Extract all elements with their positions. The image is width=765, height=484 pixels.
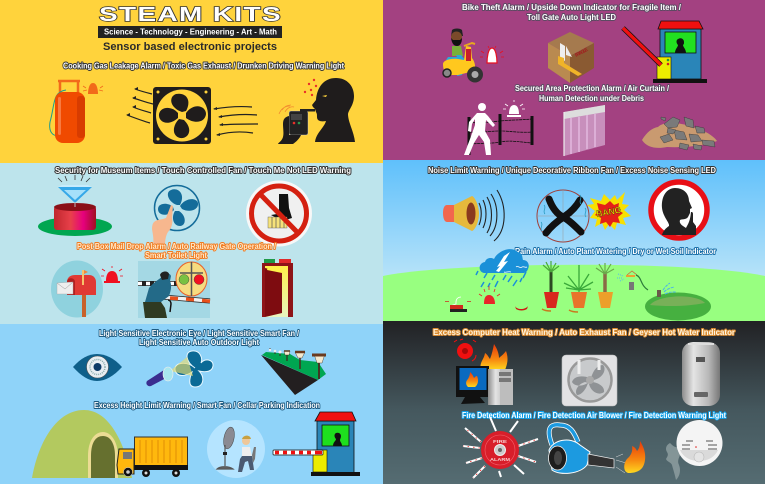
icon: fire alarm bell: ALARM [490,457,510,462]
section caption: Secured Area Protection Alarm / Air Curtain / [515,84,670,93]
section caption: Light Sensitive Electronic Eye / Light Sensitive Smart Fan / [99,329,300,338]
icon: fire alarm bell [463,417,538,478]
section caption: Noise Limit Warning / Unique Decorative Ribbon Fan / Excess Noise Sensing LED [428,166,716,175]
icon: overheating computer [454,339,513,405]
icon: open door with exit signs [262,259,293,317]
panel: theft, fragile and toll [383,0,765,160]
section caption: Bike Theft Alarm / Upside Down Indicator for Fragile Item / [462,3,682,12]
section caption: Fire Detection Alarm / Fire Detection Air Blower / Fire Detection Warning Light [462,411,726,420]
icon: air curtain [564,105,605,156]
icon: road with outdoor lamps [261,348,326,395]
icon: walker at fence with alarm [464,100,532,155]
icon: potted plants [542,261,614,312]
icon: electronic eye [73,354,122,381]
section caption [515,84,670,103]
section caption: Security for Museum Items / Touch Controlled Fan / Touch Me Not LED Warning [55,166,351,175]
icon: touch controlled fan [152,186,200,245]
section caption: Human Detection under Debris [539,94,645,103]
panel: noise and rain sensing [383,160,765,321]
panel: touch sensing [0,163,383,324]
subtitle bar: Science - Technology - Engineering - Art - Math [104,28,277,37]
section caption: Excess Computer Heat Warning / Auto Exhaust Fan / Geyser Hot Water Indicator [433,328,735,337]
icon: fragile box [548,32,594,83]
panel: heat and fire sensing [383,321,765,484]
icon: do not touch sign [246,180,312,246]
section caption [99,329,300,347]
icon: ribbon fan [537,190,589,242]
icon: gas cylinder with alarm [50,81,103,143]
section caption: Cooking Gas Leakage Alarm / Toxic Gas Exhaust / Drunken Driving Warning Light [63,62,344,70]
icon: person with smart fan [207,420,265,478]
icon: loudspeaker [443,190,504,241]
icon: rain cloud with lightning [476,249,529,287]
icon: diamond on pedestal [38,175,112,236]
section caption [77,242,277,260]
icon: breath analyser and head [278,78,355,144]
icon: toll booth with raised barrier [623,21,707,83]
icon: exhaust fan [562,355,617,406]
heading: sensor based projects: Sensor based electronic projects [103,41,277,53]
section caption: Post Box Mail Drop Alarm / Auto Railway Gate Operation / [77,242,277,251]
panel: gas and breath sensing [0,0,383,163]
section caption: Light Sensitive Auto Outdoor Light [139,338,259,347]
icon: water tap sprinkler [617,271,648,290]
icon: container truck [117,437,188,477]
icon: torch and smart fan [146,351,213,387]
icon: mailbox with alarm [51,260,123,318]
panel: light sensing and parking [0,324,383,484]
icon: toll booth with lowered barrier [273,412,360,476]
icon: exhaust fan with arrows [126,87,258,144]
icon: no noise sign [651,182,707,238]
section caption: Smart Toilet Light [145,251,207,260]
icon: debris pile [642,117,717,150]
section caption: Rain Alarm / Auto Plant Watering / Dry or Wet Soil Indicator [515,247,716,256]
icon: air blower and flame [548,425,645,473]
ground: green hill [383,265,765,321]
icon: buzzer and rain alarm [445,286,528,312]
icon: railway gate and cyclist [138,261,210,318]
icon: bang burst [587,192,631,230]
icon: geyser [682,342,720,406]
icon: man on scooter with alarm [443,28,504,82]
section caption [462,3,682,22]
icon: bang burst: BANG [596,205,622,219]
icon: fire alarm bell: FIRE [493,439,507,444]
icon: lawn sprinkler [645,283,711,320]
title: STEAM KITS: STEAM KITS [99,4,282,26]
icon: fragile box: FRAGILE [574,47,590,59]
icon: smoke detector with smoke [666,420,722,480]
section caption: Toll Gate Auto Light LED [527,13,616,22]
section caption: Excess Height Limit Warning / Smart Fan / Cellar Parking Indication [94,401,320,410]
icon: tunnel [32,410,132,478]
